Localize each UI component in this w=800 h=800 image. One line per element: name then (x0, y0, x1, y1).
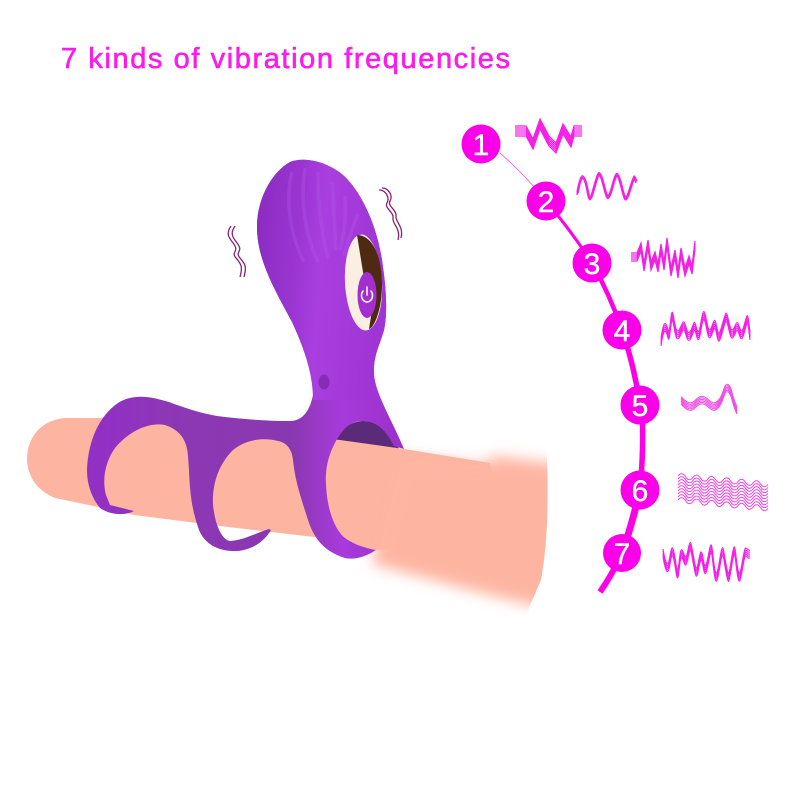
step 4: 4 (614, 315, 630, 348)
product illustration (27, 160, 570, 610)
step 3: 3 (584, 248, 600, 281)
step 1 (462, 124, 500, 164)
step 5: 5 (632, 390, 648, 423)
icon: vibration marks right (379, 188, 402, 240)
title: 7 kinds of vibration frequencies (61, 43, 510, 75)
inner back of large ring (328, 421, 402, 458)
vibrating head (257, 160, 386, 400)
waveform 1 (515, 119, 582, 153)
window reflection (343, 234, 384, 331)
waveform 3 (631, 238, 695, 278)
product: silicone body and rings (87, 160, 404, 559)
step 6: 6 (632, 475, 648, 508)
step 6 (620, 470, 660, 510)
step 3 (572, 244, 612, 282)
step 1: 1 (473, 129, 489, 162)
step 7 (603, 534, 641, 572)
control window (343, 234, 384, 331)
step 4 (602, 310, 642, 350)
waveform 2 (577, 173, 637, 200)
waveform 5 (681, 384, 737, 414)
step 5 (620, 386, 660, 424)
model body, blurred right section (372, 456, 570, 610)
frequency timeline curve (500, 153, 643, 592)
step 7: 7 (614, 538, 630, 571)
side button (318, 374, 330, 390)
waveform 4 (661, 312, 750, 346)
model body, left section (27, 418, 500, 550)
step 2 (526, 182, 566, 220)
waveform 6 (678, 474, 768, 511)
shell ribs on head (289, 168, 358, 262)
power icon (362, 287, 372, 302)
step 2: 2 (538, 186, 554, 219)
window shadow (357, 235, 382, 329)
icon: vibration marks left (228, 226, 245, 277)
power button (358, 272, 376, 318)
waveform 7 (663, 542, 750, 581)
